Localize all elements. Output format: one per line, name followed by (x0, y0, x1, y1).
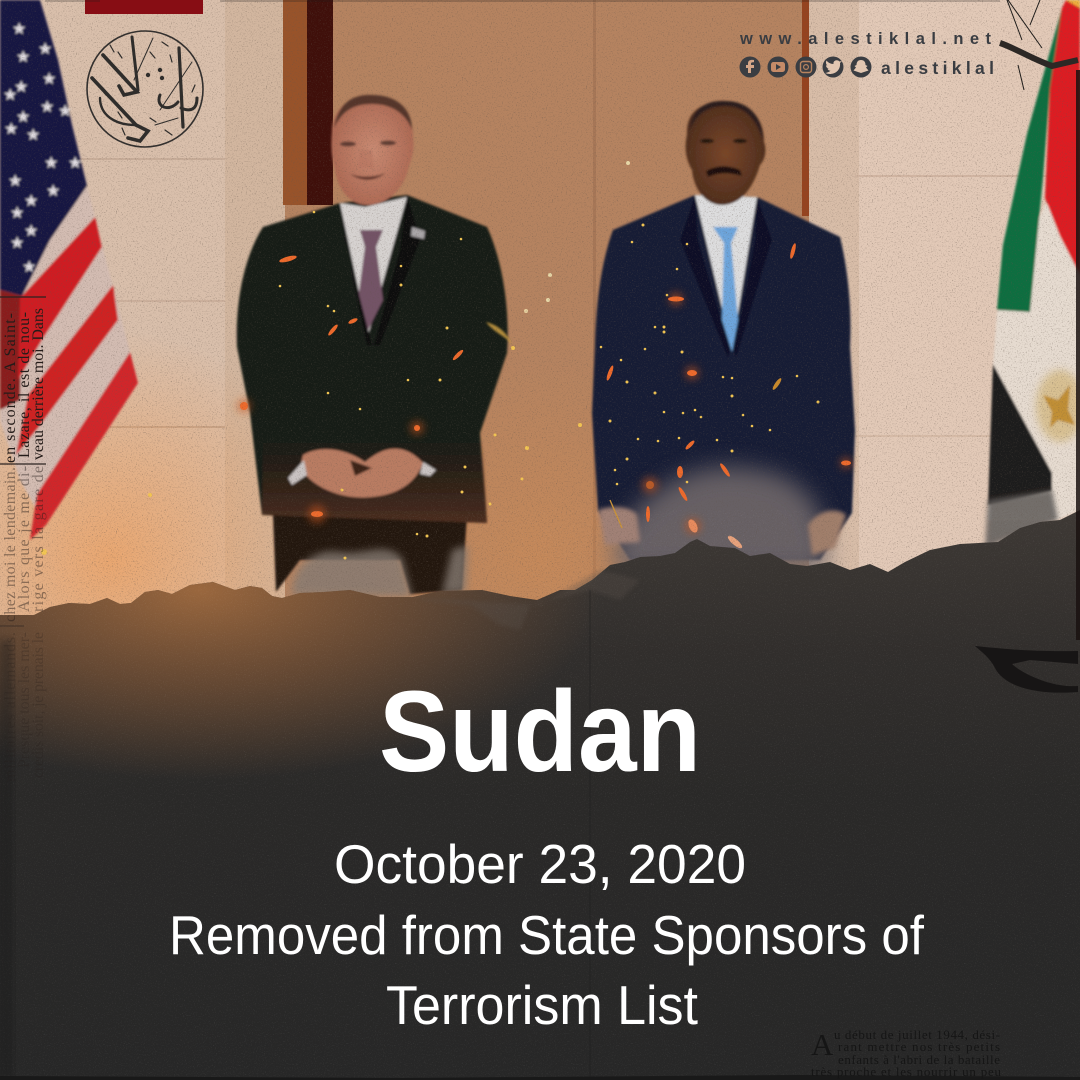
American flag: ★ (24, 221, 38, 240)
American flag (0, 0, 138, 540)
person: left figure (237, 95, 508, 594)
smoke on left figure legs (292, 545, 468, 597)
American flag: ★ (58, 101, 72, 120)
person: right figure (592, 101, 855, 560)
American flag: ★ (12, 19, 26, 38)
American flag: ★ (46, 181, 60, 200)
American flag: ★ (68, 153, 82, 172)
newspaper column strip: chez moi le lendemain. (2, 467, 19, 622)
smoke on right figure (598, 467, 846, 575)
background wall (0, 0, 1080, 640)
newspaper column strip (0, 297, 47, 782)
date and description: October 23, 2020 (334, 833, 746, 895)
newspaper column strip: en seconde. A Saint- (2, 313, 19, 463)
social handle: alestiklal (881, 58, 994, 78)
date and description (169, 833, 925, 1036)
cracked top edge (45, 0, 1078, 90)
newspaper column strip: militaires allemands. (2, 632, 19, 782)
date and description: Terrorism List (386, 974, 698, 1036)
newspaper column strip: credis soir, je prenais le (30, 632, 47, 778)
red tab (85, 0, 203, 14)
American flag: ★ (40, 97, 54, 116)
American flag: ★ (42, 69, 56, 88)
icon: youtube (768, 56, 788, 78)
website address: www.alestiklal.net (739, 30, 992, 48)
newspaper snippet: A (811, 1027, 834, 1062)
newspaper snippet: enfants à l'abri de la bataille (838, 1052, 1000, 1067)
American flag: ★ (16, 107, 30, 126)
icon: snapchat (850, 56, 872, 78)
American flag: ★ (26, 125, 40, 144)
newspaper column strip: rige vers la gare de (30, 466, 47, 612)
logo: calligraphic circle emblem (87, 31, 203, 147)
newspaper column strip: Alors que je me di- (16, 466, 33, 612)
American flag: ★ (38, 39, 52, 58)
social icons (740, 56, 872, 78)
newspaper snippet: très proche et les nourrir un peu (811, 1064, 1002, 1079)
newspaper snippet (811, 1027, 1002, 1079)
date and description: Removed from State Sponsors of (169, 904, 925, 966)
newspaper column strip: Lazare, il est de nou- (16, 312, 33, 458)
icon: twitter (822, 56, 844, 78)
wall speckle texture (0, 0, 1080, 640)
headline: Sudan (379, 668, 701, 796)
American flag: ★ (44, 153, 58, 172)
American flag: ★ (10, 203, 24, 222)
American flag: ★ (16, 47, 30, 66)
icon: facebook (740, 56, 760, 78)
Sudanese flag (985, 0, 1080, 548)
American flag: ★ (10, 233, 24, 252)
newspaper snippet: u début de juillet 1944, dési- (834, 1027, 1000, 1042)
icon: instagram (796, 56, 816, 78)
American flag: ★ (4, 119, 18, 138)
flying embers (41, 161, 852, 560)
newspaper snippet: rant mettre nos très petits (838, 1039, 1000, 1054)
newspaper column strip: Presque tous les mer- (16, 632, 33, 768)
American flag: ★ (22, 257, 36, 276)
American flag: ★ (14, 77, 28, 96)
American flag: ★ (24, 191, 38, 210)
American flag: ★ (8, 171, 22, 190)
newspaper column strip: veau derrière moi. Dans (30, 308, 47, 460)
American flag: ★ (3, 85, 17, 104)
